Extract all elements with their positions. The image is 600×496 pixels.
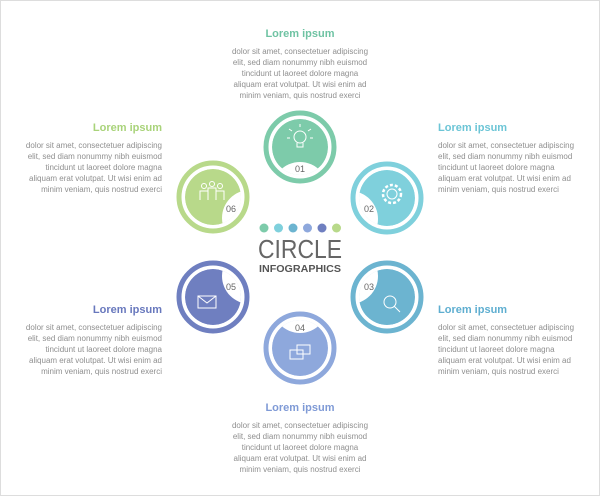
text block: top: aliquam erat volutpat. Ut wisi enim ad [234,80,366,89]
text block: left bottom: elit, sed diam nonummy nibh euismod [28,334,162,343]
text block: left bottom: minim veniam, quis nostrud exerci [41,367,162,376]
text block: top: Lorem ipsum [265,28,335,40]
text block: bottom: dolor sit amet, consectetuer adipiscing [232,421,368,430]
text block: bottom [232,402,368,474]
center title [258,224,342,275]
circle 01 [264,110,336,184]
text block: left bottom: Lorem ipsum [93,304,162,316]
text block: top: elit, sed diam nonummy nibh euismod [233,58,367,67]
text block: right top: Lorem ipsum [438,122,507,134]
circle 05: 05 [226,282,236,292]
circle 04 [264,312,336,384]
text block: right bottom: Lorem ipsum [438,304,507,316]
text block: bottom: elit, sed diam nonummy nibh euismod [233,432,367,441]
text block: right bottom [438,304,574,376]
text block: top: minim veniam, quis nostrud exerci [240,91,361,100]
text block: right top: minim veniam, quis nostrud exerci [438,185,559,194]
text block: right top: dolor sit amet, consectetuer adipiscing [438,141,574,150]
icon: bulb [287,124,313,147]
text block: left top: elit, sed diam nonummy nibh euismod [28,152,162,161]
text block: left bottom: tincidunt ut laoreet dolore magna [45,345,163,354]
text block: right top: tincidunt ut laoreet dolore magna [438,163,555,172]
text block: left bottom: aliquam erat volutpat. Ut wisi enim ad [29,356,162,365]
circle 03: 03 [364,282,374,292]
text block: left top [26,122,163,194]
center title: INFOGRAPHICS [259,264,341,275]
text block: left top: minim veniam, quis nostrud exerci [41,185,162,194]
circle 02 [350,162,424,234]
text block: right bottom: tincidunt ut laoreet dolore magna [438,345,555,354]
text block: right bottom: aliquam erat volutpat. Ut wisi enim ad [438,356,571,365]
text block: bottom: aliquam erat volutpat. Ut wisi enim ad [234,454,366,463]
icon: chat [290,345,310,359]
text block: bottom: tincidunt ut laoreet dolore magna [242,443,359,452]
text block: left top: tincidunt ut laoreet dolore magna [45,163,163,172]
text block: left bottom [26,304,163,376]
circle 02: 02 [364,204,374,214]
text block: right bottom: dolor sit amet, consectetuer adipiscing [438,323,574,332]
circle 03 [350,260,424,334]
circle 06 [176,160,250,234]
circle 05 [176,260,250,334]
text block: top [232,28,368,100]
circle 01: 01 [295,164,305,174]
text block: left top: dolor sit amet, consectetuer adipiscing [26,141,162,150]
circle 04: 04 [295,323,305,333]
icon: gear [383,185,401,203]
icon: envelope [198,296,216,308]
text block: top: tincidunt ut laoreet dolore magna [242,69,359,78]
text block: right top [438,122,574,194]
icon: people [200,182,224,200]
center title: CIRCLE [258,234,342,264]
text block: left top: Lorem ipsum [93,122,162,134]
text block: bottom: minim veniam, quis nostrud exerci [240,465,361,474]
text block: top: dolor sit amet, consectetuer adipiscing [232,47,368,56]
text block: right bottom: elit, sed diam nonummy nibh euismod [438,334,572,343]
text block: bottom: Lorem ipsum [265,402,335,414]
text block: right top: elit, sed diam nonummy nibh euismod [438,152,572,161]
text block: right bottom: minim veniam, quis nostrud exerci [438,367,559,376]
text block: left bottom: dolor sit amet, consectetuer adipiscing [26,323,162,332]
text block: right top: aliquam erat volutpat. Ut wisi enim ad [438,174,571,183]
icon: magnifier [384,296,400,312]
text block: left top: aliquam erat volutpat. Ut wisi enim ad [29,174,162,183]
circle 06: 06 [226,204,236,214]
